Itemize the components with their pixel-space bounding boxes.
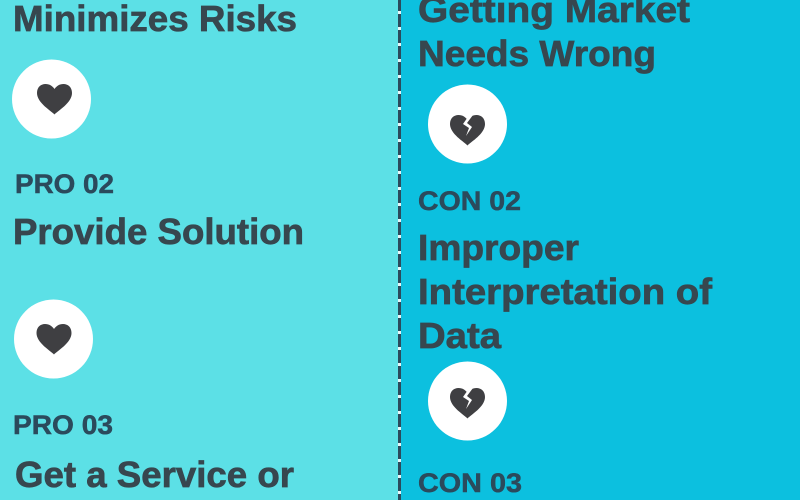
con 02 title: Data xyxy=(418,315,502,356)
con 02 label: CON 02 xyxy=(418,186,521,216)
con 02 title: Improper xyxy=(418,227,579,268)
con 02 title xyxy=(418,227,713,356)
icon: con broken heart 1 xyxy=(428,84,507,164)
panel: pros background xyxy=(0,0,399,500)
pro 02 title: Provide Solution xyxy=(13,211,304,252)
dashed divider xyxy=(398,0,401,500)
pro 02 label: PRO 02 xyxy=(15,169,114,199)
con 03 label: CON 03 xyxy=(418,468,522,498)
con 01 title: Needs Wrong xyxy=(418,33,656,74)
con 01 title xyxy=(418,0,690,74)
icon: con broken heart 2 xyxy=(428,362,507,440)
icon: pro heart 2 xyxy=(14,300,93,378)
pro 03 label: PRO 03 xyxy=(13,410,113,440)
icon: pro heart 1 xyxy=(12,60,91,138)
pro 03 title: Get a Service or xyxy=(15,454,294,495)
con 02 title: Interpretation of xyxy=(418,271,713,312)
panel: cons background xyxy=(399,0,800,500)
